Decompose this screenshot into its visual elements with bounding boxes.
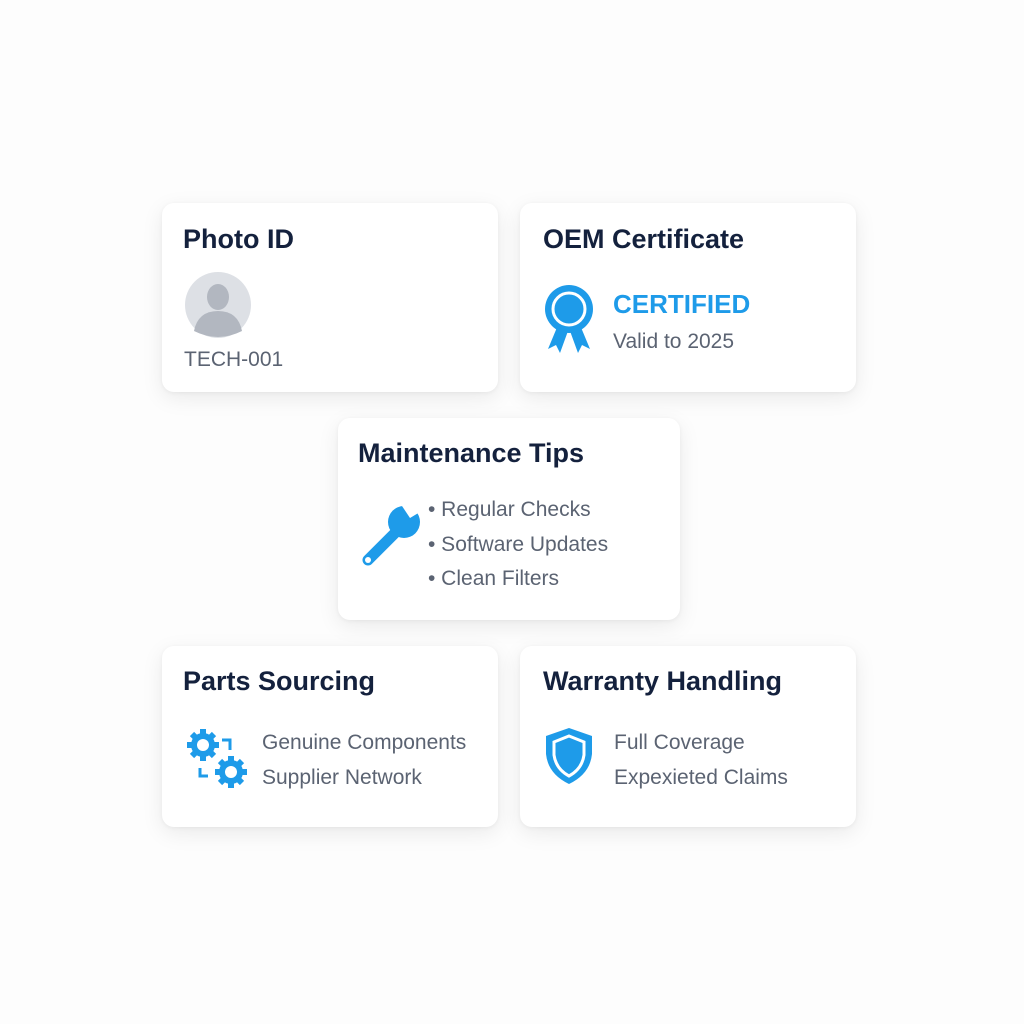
panel: oem certificate bbox=[520, 203, 856, 392]
heading: warranty handling: Warranty Handling bbox=[543, 666, 782, 696]
list: parts bbox=[262, 731, 466, 788]
icon: wrench bbox=[362, 506, 420, 566]
list: parts: Genuine Components bbox=[262, 731, 466, 754]
panel: warranty handling bbox=[520, 646, 856, 827]
text: valid: Valid to 2025 bbox=[613, 330, 734, 353]
text: certified: CERTIFIED bbox=[613, 289, 750, 319]
panel: parts sourcing bbox=[162, 646, 498, 827]
list: warranty: Expexieted Claims bbox=[614, 766, 788, 788]
list: tips: • Software Updates bbox=[428, 532, 608, 556]
icon: ribbon badge bbox=[545, 285, 593, 353]
list: warranty bbox=[614, 731, 788, 788]
heading: parts sourcing: Parts Sourcing bbox=[183, 666, 375, 696]
icon: avatar bbox=[185, 272, 251, 338]
heading: maintenance tips: Maintenance Tips bbox=[358, 438, 584, 468]
icon: gears bbox=[187, 729, 247, 788]
list: warranty: Full Coverage bbox=[614, 731, 745, 754]
panel: maintenance tips bbox=[338, 418, 680, 620]
icon: shield bbox=[546, 728, 592, 784]
list: tips: • Regular Checks bbox=[428, 498, 591, 521]
list: tips bbox=[428, 498, 608, 590]
heading: photo id: Photo ID bbox=[183, 224, 294, 254]
panel: photo id bbox=[162, 203, 498, 392]
list: tips: • Clean Filters bbox=[428, 567, 559, 590]
list: parts: Supplier Network bbox=[262, 766, 422, 788]
heading: oem certificate: OEM Certificate bbox=[543, 224, 744, 254]
text: tech id: TECH-001 bbox=[184, 348, 283, 371]
